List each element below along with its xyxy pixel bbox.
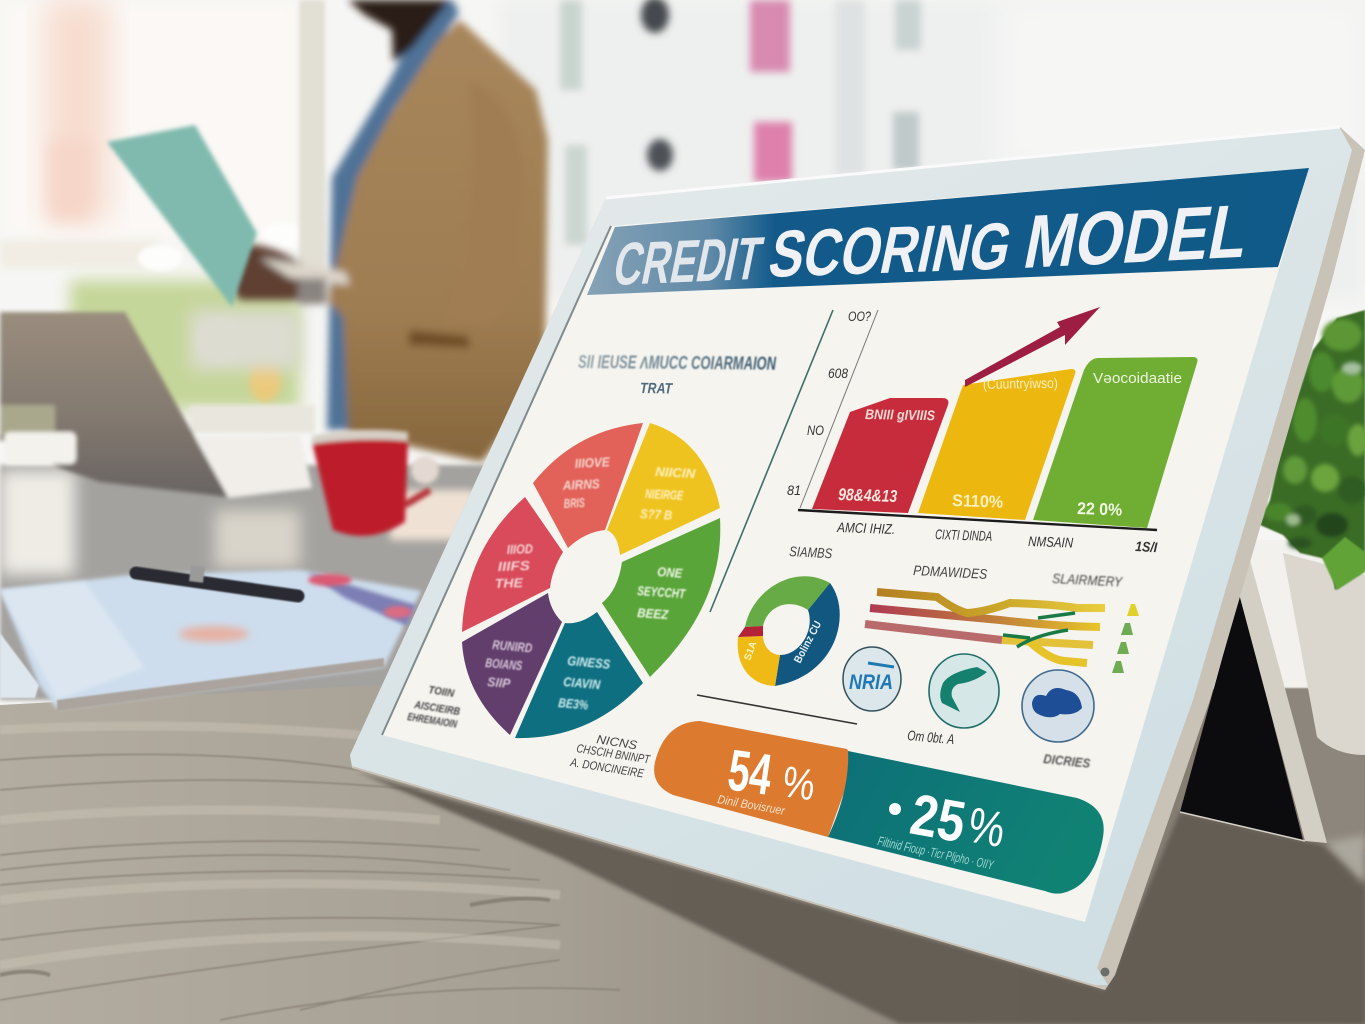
bar: red (812, 398, 948, 513)
x axis labels: AMCI IHIZ. (836, 519, 895, 537)
slice: purple (462, 593, 562, 735)
pie footnotes: CHSCIH BNINPT (576, 741, 652, 767)
header band (587, 168, 1309, 298)
icon: blue logo circle (843, 647, 901, 711)
background laptop (0, 312, 312, 498)
slice: teal (515, 612, 643, 738)
tablet screen (382, 168, 1309, 922)
icon captions: Om 0bt. A (907, 727, 955, 747)
pie footnotes: NICNS (596, 732, 638, 752)
flow chart lines (865, 592, 1105, 663)
y axis ticks (787, 308, 871, 498)
bar labels: S110% (952, 491, 1003, 512)
pie slice labels: SIIP (487, 674, 511, 691)
x axis (798, 510, 1157, 530)
y axis ticks: OO? (848, 308, 871, 324)
icon: blue logo circle: NRIA (849, 671, 893, 694)
title word: SCORING: SCORING (763, 209, 1019, 292)
pie footnotes: TOIIN (428, 684, 456, 700)
pie slice labels: BEEZ (637, 605, 670, 622)
stat pill: teal 25%: % (964, 797, 1009, 858)
bar: yellow (918, 369, 1076, 520)
section labels: SLAIRMERY (1052, 570, 1124, 590)
pie heading (578, 352, 777, 398)
stat pill: teal 25%: 25 (906, 782, 970, 855)
section labels: SIAMBS (789, 543, 833, 561)
pie slice labels: SEYCCHT (637, 583, 687, 601)
stat pill: orange 54% (654, 721, 853, 837)
bar chart (710, 308, 1198, 612)
flow chart end markers (1112, 604, 1139, 673)
wood grain (0, 726, 620, 1020)
slice: green (602, 518, 720, 677)
pie slice labels: BE3% (558, 695, 589, 713)
bar labels: BNIII ǥIVIIIS (865, 406, 936, 423)
pie slice labels: THE (495, 575, 523, 591)
small donut chart: S1A (742, 640, 759, 662)
pie footnotes: EHREMAIOIN (407, 711, 459, 731)
pie slice labels: BOIANS (485, 655, 523, 673)
pie footnotes: AISCIEIRB (413, 699, 461, 718)
pie slice labels: ONE (657, 564, 683, 581)
pie slice labels: IIIFS (498, 558, 530, 574)
donut labels: Bolinz CU (792, 619, 824, 665)
pie slice labels: BRIS (563, 495, 585, 511)
bar labels: Vəocoidaatie (1093, 370, 1182, 387)
bar labels: (Cuuntryiwso) (983, 375, 1058, 392)
lit wood patch (1325, 835, 1365, 885)
divider line (697, 695, 857, 724)
background red mug (312, 430, 439, 536)
slice: red (462, 497, 563, 632)
pie chart (462, 423, 720, 738)
pie slice labels: NIEIRGE (645, 486, 684, 503)
icon: cloud circle (1022, 670, 1094, 742)
pie slice labels: IIIOD (507, 541, 534, 557)
bar labels: 22 0% (1077, 499, 1122, 520)
x axis labels (836, 519, 1159, 555)
pie slice labels: IIIOVE (574, 454, 610, 471)
background person in tan jacket (218, 0, 548, 462)
screen inner edge (382, 226, 611, 735)
slice: coral (533, 423, 643, 548)
pie slice labels: NIICIN (655, 464, 696, 481)
tablet shadow on desk (357, 772, 1365, 1024)
pie footnotes (407, 684, 652, 781)
icon: teal circle (929, 654, 999, 728)
title word: MODEL: MODEL (1018, 189, 1256, 285)
pie slice labels: GINESS (567, 653, 611, 672)
section labels: PDMAWIDES (913, 562, 988, 582)
growth arrow (965, 307, 1100, 387)
stat pill: orange 54%: 54 (724, 738, 776, 808)
pie footnotes: A. DONCINEIRE (569, 755, 646, 781)
y axis ticks: 81 (787, 482, 801, 498)
pie heading: TRAT (640, 380, 674, 398)
title word: CREDIT: CREDIT (608, 224, 768, 298)
desk surface (0, 465, 1365, 1024)
stat pill: teal 25% (828, 751, 1104, 894)
slice: yellow (607, 423, 720, 555)
y axis ticks: 608 (828, 365, 848, 381)
pie slice labels: RUNIRD (492, 637, 533, 656)
background building windows (560, 0, 921, 245)
white wall behind stand (1245, 540, 1365, 690)
white pot (1283, 553, 1365, 755)
bar labels: 98&4&13 (838, 485, 898, 506)
stat pill: orange 54%: Dinil Bovisruer (716, 792, 787, 818)
pie slice labels: AIRNS (561, 476, 600, 493)
tablet frame (350, 127, 1365, 990)
pie slice labels: S?7 B (640, 506, 673, 523)
icon captions (907, 727, 1091, 771)
icon captions: DICRIES (1043, 751, 1091, 771)
stat pill: orange 54%: % (780, 757, 818, 810)
stat pill: teal 25%: Filtinid Fioup ·Ticr Plipho · OIIY (876, 833, 996, 873)
background booklet and pen (0, 565, 421, 711)
section labels (789, 543, 1124, 590)
plant (1260, 310, 1365, 590)
pie slice labels: CIAVIN (563, 674, 601, 692)
pie heading: SII IEUSE ΛMUCC COIARMAION (578, 352, 777, 374)
tablet stand (1180, 560, 1327, 843)
bar: green (1033, 357, 1198, 528)
x axis labels: NMSAIN (1028, 533, 1074, 551)
background clipboard (107, 125, 257, 307)
small donut chart (738, 576, 840, 686)
bar labels (838, 370, 1182, 520)
y axis ticks: NO (807, 422, 824, 438)
right wood under pot (1282, 688, 1365, 850)
pie slice labels (485, 454, 696, 713)
x axis labels: CIXTI DINDA (935, 526, 992, 544)
x axis labels: 1S/I (1135, 538, 1159, 555)
